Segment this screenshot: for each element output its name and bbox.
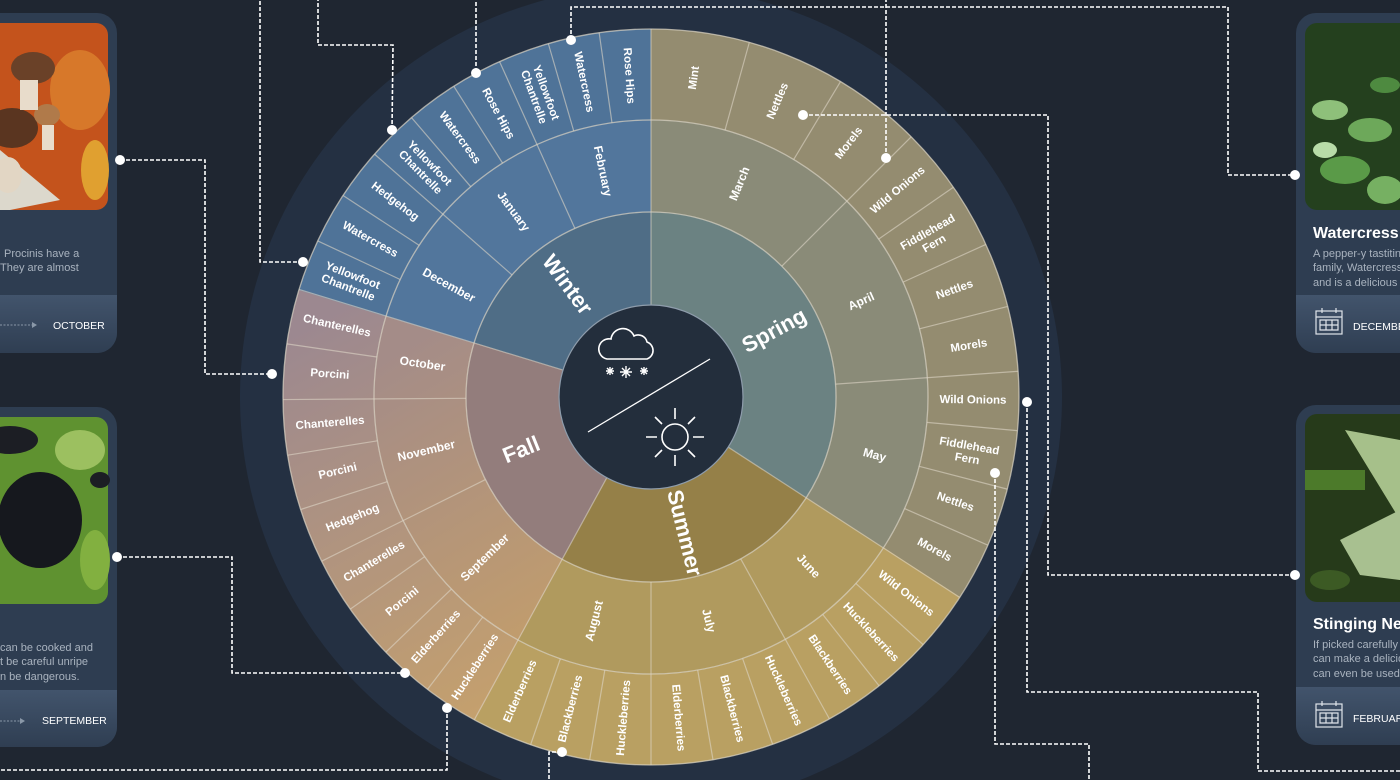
divider line in hub xyxy=(588,359,710,432)
card: porcini (left top) xyxy=(0,13,125,353)
background halo circle xyxy=(240,0,1062,780)
season labels: Summer xyxy=(662,487,708,579)
month labels: October xyxy=(399,353,447,374)
outer item labels: Huckleberries xyxy=(450,632,501,702)
sunburst wheel xyxy=(205,0,1097,780)
card: elderberries (left bottom): n be dangerous. xyxy=(0,671,80,683)
center hub xyxy=(559,305,743,489)
outer item labels: Nettles xyxy=(765,81,791,121)
ring: outer items xyxy=(205,0,1097,780)
outer item labels: Porcini xyxy=(310,367,350,382)
card: porcini (left top): They are almost xyxy=(0,262,79,274)
outer item labels: Elderberries xyxy=(410,608,463,666)
card: stinging nettles (right bottom): If picked carefully xyxy=(1313,639,1398,651)
outer item labels: Morels xyxy=(915,536,953,564)
outer item labels: Huckleberries xyxy=(762,654,804,728)
icon: snow cloud xyxy=(599,329,653,378)
month labels: August xyxy=(582,599,606,643)
outer item labels: Mint xyxy=(687,65,702,90)
outer item labels: Blackberries xyxy=(557,674,585,744)
ring: months xyxy=(331,77,971,717)
month labels: July xyxy=(699,607,719,634)
month labels: January xyxy=(494,189,533,234)
outer item labels: Nettles xyxy=(935,278,975,302)
outer item labels: Huckleberries xyxy=(615,679,633,756)
outer item labels: Yellowfoot xyxy=(530,64,561,122)
card: porcini (left top): OCTOBER xyxy=(53,320,105,332)
card: elderberries (left bottom): t be careful unripe xyxy=(0,656,88,668)
icon: sun xyxy=(646,408,704,466)
outer item labels: Blackberries xyxy=(806,633,854,697)
image: elderberries xyxy=(0,417,110,604)
season labels xyxy=(499,250,811,579)
image: nettles xyxy=(1305,414,1400,602)
icon: calendar xyxy=(1316,308,1342,334)
outer item labels: Chantrelle xyxy=(319,272,376,304)
card: watercress (right top): Watercress xyxy=(1313,225,1399,242)
image: porcini xyxy=(0,23,110,210)
outer item labels: Fiddlehead xyxy=(938,435,1000,458)
month labels: February xyxy=(591,144,615,198)
season labels: Winter xyxy=(537,250,598,320)
card: stinging nettles (right bottom) xyxy=(1290,405,1400,745)
outer item labels: Elderberries xyxy=(669,684,687,752)
outer item labels: Chanterelles xyxy=(302,313,372,340)
outer item labels: Watercress xyxy=(571,51,596,114)
card: elderberries (left bottom): can be cooked and xyxy=(0,642,93,654)
outer item labels: Fern xyxy=(921,233,948,255)
month labels: April xyxy=(846,289,877,313)
icon: calendar xyxy=(1316,701,1342,727)
outer item labels: Nettles xyxy=(935,490,975,514)
card: stinging nettles (right bottom): can even be used xyxy=(1313,668,1400,680)
month labels: September xyxy=(458,531,512,584)
outer item labels: Huckleberries xyxy=(840,601,901,664)
ring: seasons xyxy=(459,205,843,589)
outer item labels: Hedgehog xyxy=(369,180,421,224)
outer item labels: Chanterelles xyxy=(295,415,365,432)
outer item labels: Fern xyxy=(954,451,980,467)
outer item labels: Porcini xyxy=(384,585,421,619)
outer item labels: Rose Hips xyxy=(621,47,636,104)
outer item labels: Porcini xyxy=(317,461,358,482)
outer item labels: Elderberries xyxy=(501,658,540,725)
outer item labels: Watercress xyxy=(340,220,400,260)
outer item labels: Morels xyxy=(950,337,988,355)
season labels: Fall xyxy=(499,431,543,468)
month labels: June xyxy=(794,551,823,581)
image: watercress xyxy=(1305,23,1400,210)
outer item labels: Yellowfoot xyxy=(405,139,454,188)
month labels: March xyxy=(726,165,753,203)
season labels: Spring xyxy=(737,303,811,358)
month labels xyxy=(396,144,888,643)
outer item labels: Hedgehog xyxy=(324,502,381,534)
outer item labels: Chantrelle xyxy=(518,69,549,126)
month labels: May xyxy=(862,445,888,465)
outer item labels: Rose Hips xyxy=(479,86,517,141)
outer item labels: Wild Onions xyxy=(868,164,928,217)
card: watercress (right top): family, Watercress xyxy=(1313,262,1400,274)
card: watercress (right top) xyxy=(1290,13,1400,353)
outer item labels: Morels xyxy=(833,125,865,162)
outer item labels: Watercress xyxy=(436,110,483,166)
outer item labels: Wild Onions xyxy=(876,569,936,619)
outer item labels: Chantrelle xyxy=(396,148,444,197)
outer item labels: Yellowfoot xyxy=(324,260,382,292)
card: elderberries (left bottom): SEPTEMBER xyxy=(42,715,107,727)
outer item labels: Blackberries xyxy=(717,674,746,744)
card: watercress (right top): and is a delicious xyxy=(1313,277,1398,289)
card: porcini (left top): Procinis have a xyxy=(4,248,80,260)
outer item labels: Wild Onions xyxy=(939,394,1007,407)
card: elderberries (left bottom) xyxy=(0,407,122,747)
outer item labels xyxy=(295,47,1007,756)
outer item labels: Chanterelles xyxy=(342,539,407,585)
month labels: November xyxy=(396,437,457,464)
outer item labels: Fiddlehead xyxy=(899,213,957,253)
month labels: December xyxy=(420,265,478,305)
